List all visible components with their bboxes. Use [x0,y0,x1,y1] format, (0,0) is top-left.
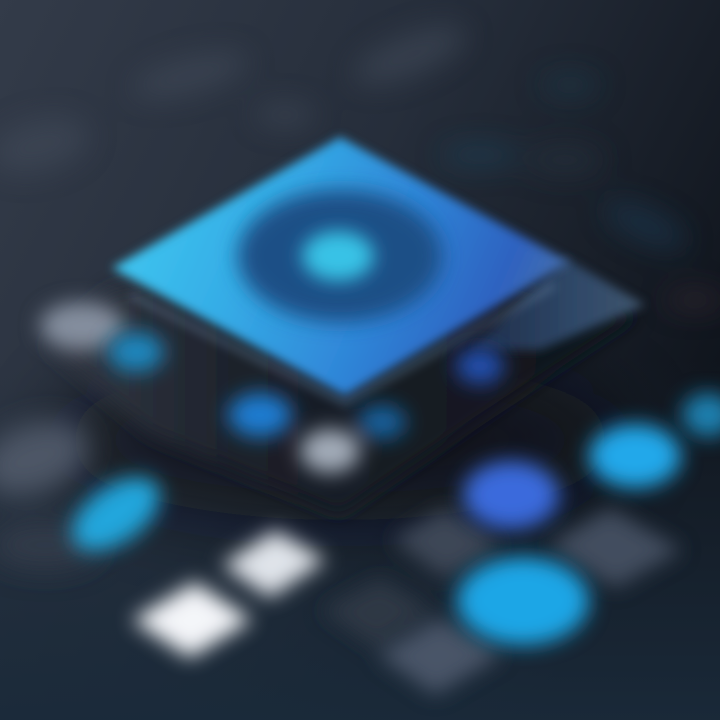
dial centre [302,231,374,281]
edge cyan tile [682,393,720,437]
cyan pill [59,462,173,566]
large cyan tile [457,557,589,645]
blue tile [463,461,559,529]
white tiles [132,530,326,658]
cyan tile [589,424,681,488]
left light block [40,302,124,350]
left grey tiles [0,407,100,569]
panel front edge [130,285,555,403]
main top panel [112,137,570,396]
faint background tiles [0,14,720,310]
right wing panel [470,258,645,350]
device lights [108,332,504,473]
dial ring [238,190,442,322]
right grey tiles [322,508,682,695]
device base [45,240,640,515]
device shadow [60,360,620,520]
